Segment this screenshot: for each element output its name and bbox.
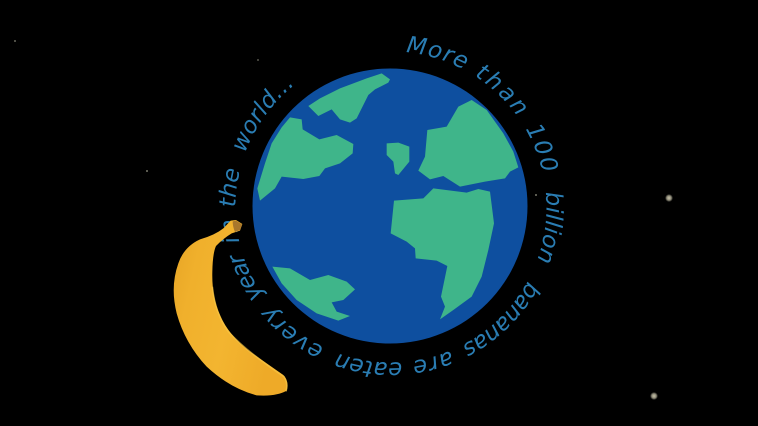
circular caption: the: [218, 168, 239, 206]
stars: [14, 40, 673, 400]
circular caption: year: [230, 255, 268, 301]
circular caption: than: [476, 64, 526, 114]
globe ocean: [252, 68, 528, 344]
circular caption: every: [260, 310, 322, 356]
circular caption: billion: [538, 192, 564, 263]
circular caption: eaten: [336, 354, 402, 377]
circular caption: 100: [526, 124, 558, 170]
globe: [252, 68, 528, 344]
continents: [257, 73, 518, 321]
circular caption: world...: [234, 84, 292, 150]
circular caption: are: [414, 352, 452, 373]
circular caption: More: [406, 36, 468, 68]
icon: banana: [174, 220, 287, 396]
circular caption: [218, 36, 564, 377]
circular caption: in: [221, 221, 240, 242]
circular caption: bananas: [464, 282, 541, 356]
